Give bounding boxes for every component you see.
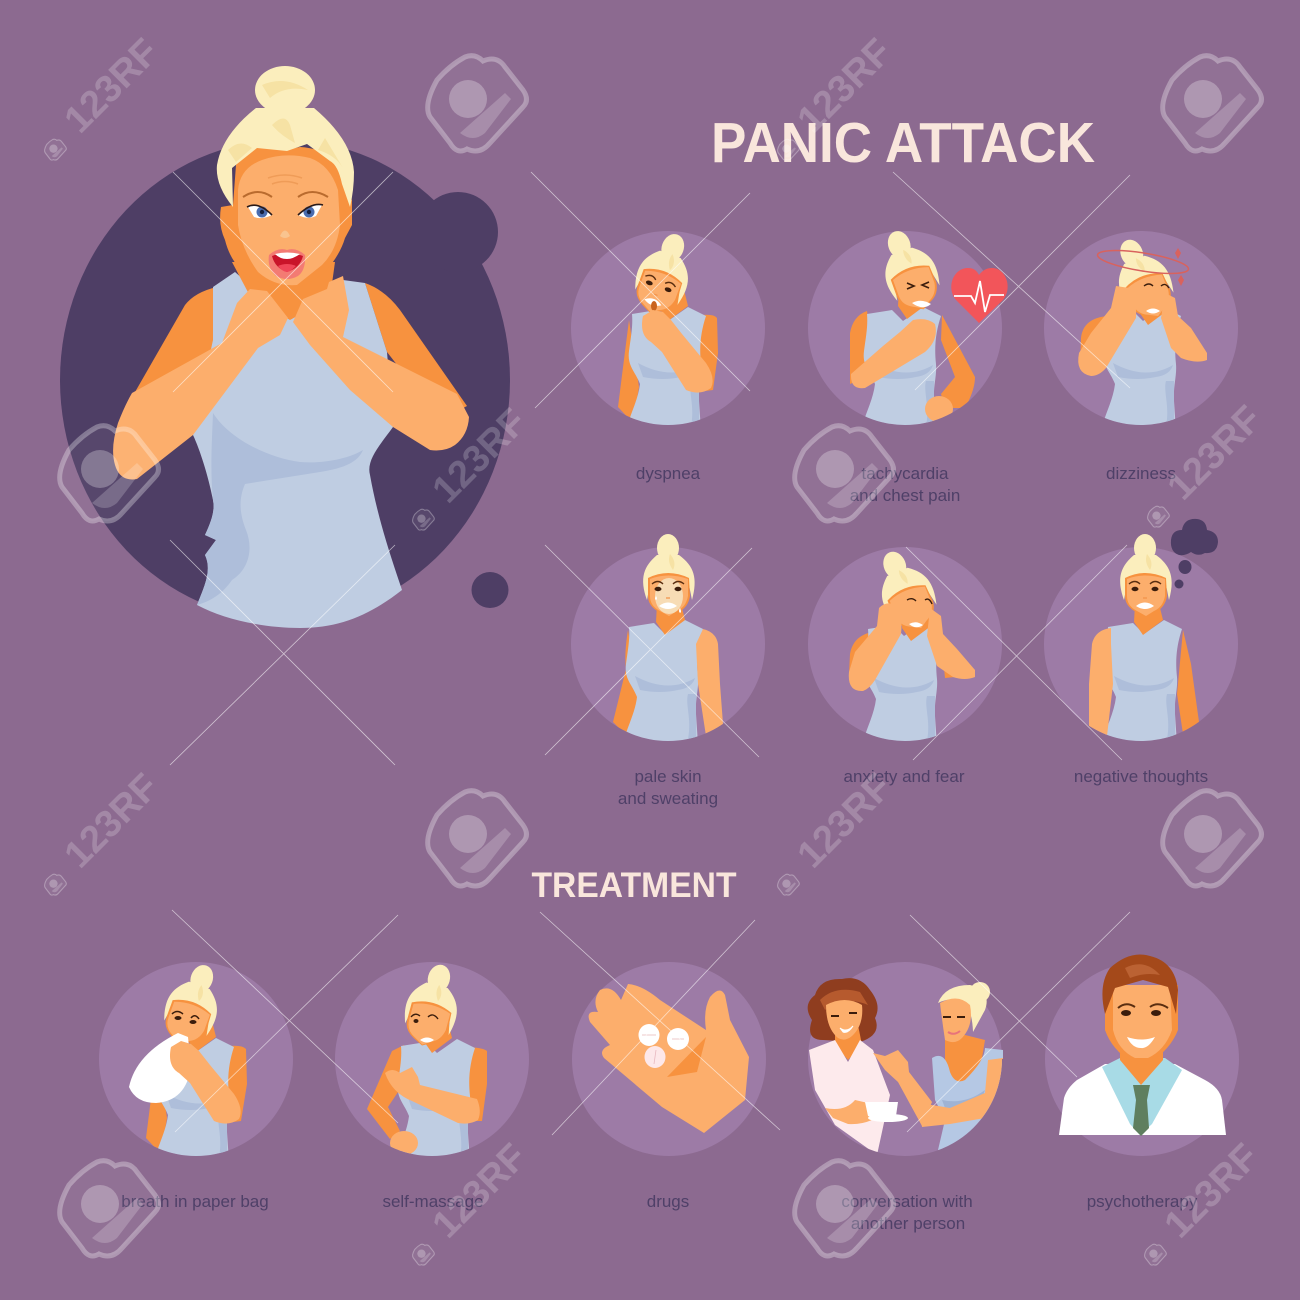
icon: dizzy swirl: [1096, 246, 1190, 286]
watermark text: 123RF: [57, 31, 167, 141]
figure: [613, 534, 723, 744]
circle: [1045, 962, 1239, 1156]
panel: pale skin and sweating: [571, 534, 765, 808]
circle: [99, 962, 293, 1156]
panel: conversation with another person: [808, 962, 1003, 1233]
label: self-massage: [382, 1192, 484, 1211]
head: [217, 66, 354, 290]
label: negative thoughts: [1074, 767, 1208, 786]
watermark text: 123RF: [790, 31, 900, 141]
right arm: [293, 276, 469, 450]
watermark text: 123RF: [1157, 1136, 1267, 1246]
left arm: [113, 289, 288, 479]
heading: treatment: TREATMENT: [532, 866, 736, 905]
circle: [808, 962, 1002, 1156]
tie: [1133, 1085, 1150, 1136]
figure: [367, 959, 487, 1163]
figure: [850, 222, 975, 431]
watermark text: 123RF: [57, 766, 167, 876]
label: another person: [851, 1214, 965, 1233]
thought bubble small: [472, 572, 508, 608]
figure: [129, 957, 247, 1162]
figure: [1078, 230, 1207, 431]
circle: [572, 962, 766, 1156]
figure: doctor: [1059, 954, 1226, 1136]
watermark text: 123RF: [425, 401, 535, 511]
label: and chest pain: [850, 486, 960, 505]
label: dyspnea: [636, 464, 701, 483]
label: pale skin: [634, 767, 702, 786]
watermark text: 123RF: [790, 766, 900, 876]
panel: tachycardia and chest pain: [808, 222, 1008, 505]
eyes and smile: [1118, 1004, 1168, 1048]
icon: heart with pulse: [951, 268, 1008, 323]
panel: psychotherapy: [1045, 954, 1239, 1211]
label: and sweating: [618, 789, 718, 808]
dark circle backdrop: [60, 140, 510, 620]
panel: drugs: [572, 962, 766, 1211]
circle: [1044, 231, 1238, 425]
woman with blonde bun: [873, 982, 1003, 1150]
panel: negative thoughts: [1044, 519, 1238, 786]
label: breath in paper bag: [121, 1192, 269, 1211]
circle: [335, 962, 529, 1156]
circle: [808, 547, 1002, 741]
face: [1105, 985, 1178, 1065]
figure: [618, 226, 718, 431]
label: conversation with: [841, 1192, 973, 1211]
label: dizziness: [1106, 464, 1176, 483]
figure: [849, 542, 975, 746]
neck: [232, 262, 335, 320]
title: PANIC ATTACK: [711, 111, 1095, 175]
circle: [808, 231, 1002, 425]
neck: [1120, 1040, 1163, 1085]
thought bubble large: [418, 192, 498, 272]
circle: [571, 547, 765, 741]
label: tachycardia: [862, 464, 948, 483]
panel: self-massage: [335, 959, 529, 1211]
dress: [193, 272, 402, 628]
panel: dyspnea: [571, 226, 765, 483]
watermark crosses: [170, 172, 1130, 1135]
icon: thought cloud: [1171, 519, 1218, 588]
upper arms: [123, 283, 467, 420]
label: drugs: [647, 1192, 689, 1211]
icon: hand with pills: [589, 984, 749, 1133]
label: psychotherapy: [1087, 1192, 1198, 1211]
panel: anxiety and fear: [808, 542, 1002, 786]
circle: [571, 231, 765, 425]
figure: [1089, 534, 1199, 744]
label: anxiety and fear: [844, 767, 965, 786]
white coat: [1059, 1064, 1226, 1135]
panel: breath in paper bag: [99, 957, 293, 1211]
circle: [1044, 547, 1238, 741]
shirt: [1102, 1058, 1182, 1135]
friend with curly hair: [808, 978, 908, 1155]
watermark text: 123RF: [1160, 398, 1270, 508]
main illustration: panicking woman: [60, 66, 510, 628]
figure: two women talking: [808, 978, 1003, 1155]
panel: dizziness: [1044, 230, 1238, 483]
watermark text: 123RF: [425, 1136, 535, 1246]
hair: [1102, 954, 1178, 1014]
